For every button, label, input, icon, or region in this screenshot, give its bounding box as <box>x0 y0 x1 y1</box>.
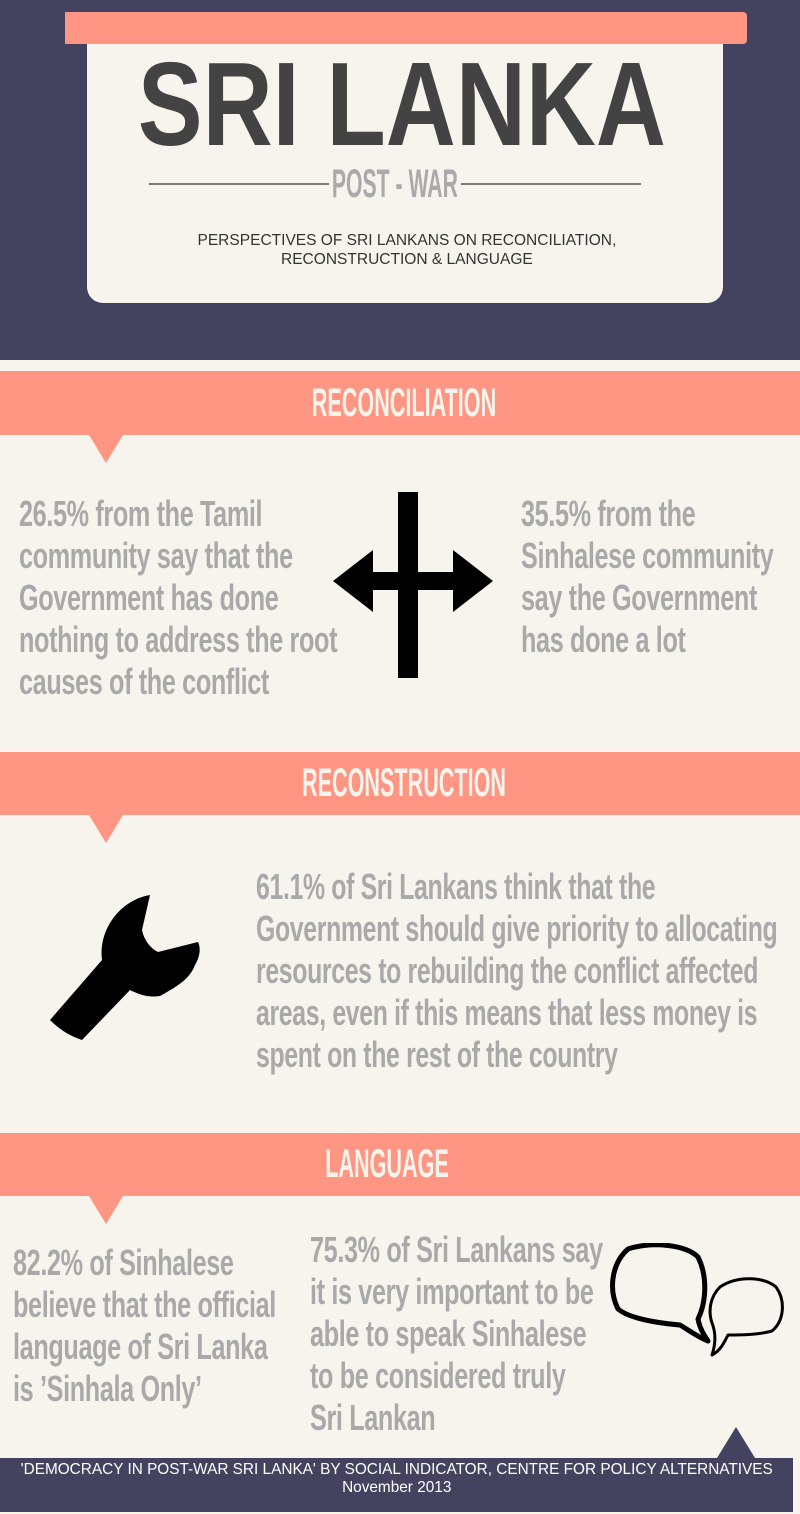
text: tamil: nothing to address the root <box>19 619 337 660</box>
text: tamil: Government has done <box>19 577 278 618</box>
text: tamil: community say that the <box>19 535 293 576</box>
pointer <box>89 435 123 463</box>
tagline: RECONSTRUCTION & LANGUAGE <box>281 251 533 268</box>
icon: wrench <box>50 895 200 1040</box>
text: sinhalese: Sinhalese community <box>521 535 773 576</box>
footer: 'DEMOCRACY IN POST-WAR SRI LANKA' BY SOCIAL INDICATOR, CENTRE FOR POLICY ALTERNATIVES <box>20 1461 773 1478</box>
text: speak sinhalese: it is very important to be <box>310 1271 594 1312</box>
text: speak sinhalese <box>310 1229 603 1438</box>
heading: language: LANGUAGE <box>325 1142 449 1186</box>
heading: reconstruction <box>0 752 800 815</box>
text: speak sinhalese: to be considered truly <box>310 1355 566 1396</box>
salmon header bar <box>65 12 747 44</box>
heading: reconstruction: RECONSTRUCTION <box>302 761 506 805</box>
title card <box>87 30 723 303</box>
text: sinhalese: has done a lot <box>521 619 686 660</box>
text: tamil <box>19 493 338 702</box>
text: sinhalese: 35.5% from the <box>521 493 695 534</box>
header background <box>0 0 800 360</box>
pointer <box>89 1196 123 1224</box>
footer: November 2013 <box>342 1479 451 1496</box>
text: reconstruction <box>256 866 777 1075</box>
text: official language: is ’Sinhala Only’ <box>13 1368 202 1409</box>
footer triangle <box>717 1427 755 1458</box>
heading: language <box>0 1133 800 1196</box>
text: reconstruction: Government should give priority to allocating <box>256 908 777 949</box>
text: reconstruction: 61.1% of Sri Lankans think that the <box>256 866 655 907</box>
text: speak sinhalese: able to speak Sinhalese <box>310 1313 586 1354</box>
text: reconstruction: areas, even if this means that less money is <box>256 992 757 1033</box>
text: official language <box>13 1242 276 1409</box>
icon: crossroads arrow <box>333 492 493 678</box>
tagline: PERSPECTIVES OF SRI LANKANS ON RECONCILIATION, <box>198 232 616 249</box>
text: official language: believe that the official <box>13 1284 276 1325</box>
heading: reconciliation <box>0 371 800 435</box>
subtitle post-war: POST - WAR <box>332 162 458 206</box>
title: SRI LANKA <box>138 38 666 171</box>
text: sinhalese: say the Government <box>521 577 757 618</box>
icon: speech bubbles <box>610 1243 784 1357</box>
pointer <box>89 815 123 843</box>
text: sinhalese <box>521 493 774 660</box>
text: official language: 82.2% of Sinhalese <box>13 1242 234 1283</box>
text: speak sinhalese: 75.3% of Sri Lankans say <box>310 1229 603 1270</box>
heading: reconciliation: RECONCILIATION <box>312 380 496 424</box>
text: official language: language of Sri Lanka <box>13 1326 268 1367</box>
text: reconstruction: spent on the rest of the country <box>256 1034 618 1075</box>
footer <box>0 1458 793 1512</box>
text: reconstruction: resources to rebuilding the conflict affected <box>256 950 758 991</box>
text: tamil: causes of the conflict <box>19 661 269 702</box>
tagline <box>198 232 616 268</box>
text: speak sinhalese: Sri Lankan <box>310 1397 435 1438</box>
text: tamil: 26.5% from the Tamil <box>19 493 262 534</box>
